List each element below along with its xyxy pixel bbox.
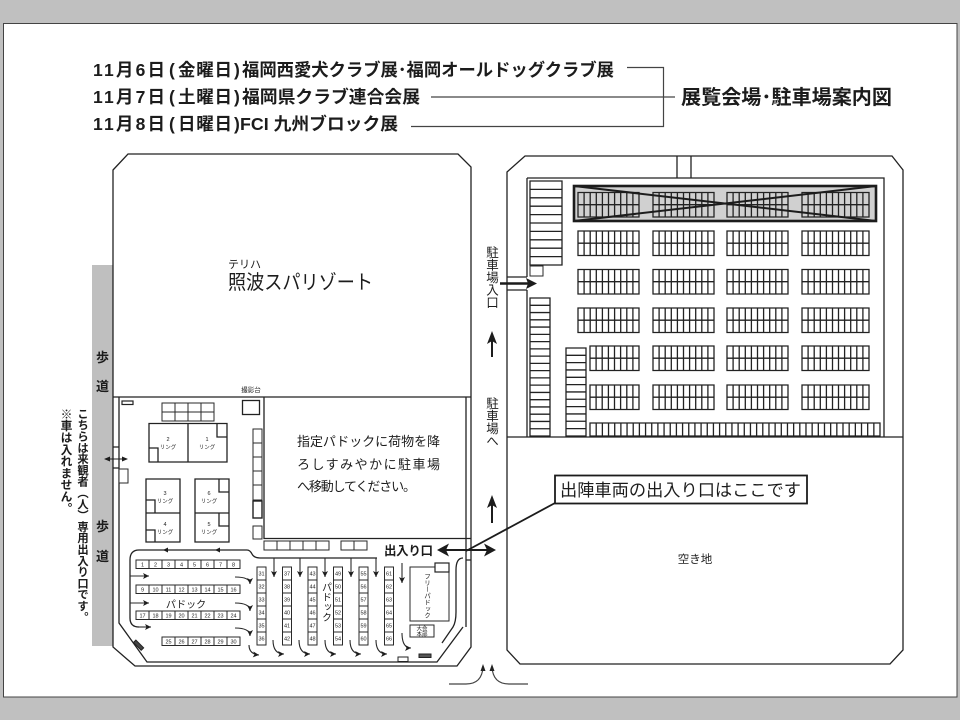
tents along divider <box>264 541 367 550</box>
paddock stall columns 31-66: 54 <box>335 636 341 642</box>
tent grid <box>162 403 214 421</box>
unloading instructions: 指定パドックに荷物を降 <box>297 434 440 449</box>
paddock circulation route <box>130 548 411 655</box>
paddock stall columns 31-66: 63 <box>386 598 392 604</box>
paddock stall columns 31-66: 34 <box>258 610 265 616</box>
to parking label: 駐車場へ <box>484 396 498 447</box>
exit lane curve <box>442 558 463 643</box>
heading: event schedule: 日曜日 <box>178 114 232 134</box>
walkway band: 歩 <box>96 350 109 365</box>
walkway band: 道 <box>96 549 109 564</box>
up arrow 1 <box>487 331 497 357</box>
paddock label vertical: パドック <box>320 582 332 622</box>
paddock stalls 9-16: 9 <box>141 588 144 594</box>
paddock stalls 9-16 <box>136 585 240 594</box>
paddock stalls 17-24: 24 <box>230 614 237 620</box>
paddock stall columns 31-66: 62 <box>386 584 392 590</box>
paddock stall columns 31-66: 33 <box>258 598 265 604</box>
walkway band: 道 <box>96 379 109 394</box>
paddock stalls 25-30: 30 <box>230 640 237 646</box>
paddock stall columns 31-66: 31 <box>258 572 265 578</box>
paddock stalls 9-16: 13 <box>191 588 198 594</box>
rings 1 and 2 <box>149 424 227 462</box>
left note about visitor entrance: こちらは来観者（人）専用出入り口です。 <box>76 408 89 623</box>
heading: event schedule: 11月6日 <box>93 60 165 80</box>
left note about visitor entrance: ※車は入れません。 <box>59 408 73 514</box>
paddock stalls 9-16: 15 <box>217 588 224 594</box>
paddock stall columns 31-66: 55 <box>360 572 367 578</box>
paddock stall columns 31-66: 65 <box>386 624 392 630</box>
bottom parking strip <box>590 423 880 436</box>
paddock stalls 17-24 <box>136 611 240 620</box>
closed parking block <box>574 186 876 221</box>
paddock stalls 1-8: 1 <box>141 562 144 568</box>
rings 5 and 6: リング <box>201 497 218 505</box>
paddock stall columns 31-66: 38 <box>284 584 290 590</box>
paddock stalls 17-24: 17 <box>139 614 146 620</box>
schedule bracket connector <box>411 68 675 126</box>
paddock stall columns 31-66: 36 <box>258 636 265 642</box>
paddock stalls 9-16: 11 <box>166 588 171 594</box>
corner marker lower left <box>133 640 144 650</box>
paddock stalls 1-8: 8 <box>232 562 235 568</box>
paddock stall columns 31-66: 47 <box>309 624 316 630</box>
paddock label horizontal: パドック <box>166 599 206 611</box>
vacant lot label: 空き地 <box>678 553 713 566</box>
unloading instructions <box>297 434 440 494</box>
heading: event schedule: ( <box>169 114 175 134</box>
paddock stalls 25-30: 26 <box>178 640 185 646</box>
heading: event schedule: 福岡西愛犬クラブ展･福岡オールドッグクラブ展 <box>242 60 614 80</box>
rings 5 and 6: 5 <box>207 522 211 528</box>
paddock stalls 17-24: 22 <box>204 614 211 620</box>
side tents <box>253 429 262 539</box>
free paddock <box>410 563 449 621</box>
paddock stalls 1-8: 2 <box>154 562 157 568</box>
rings 1 and 2: リング <box>160 443 177 451</box>
resort label: 照波スパリゾート <box>228 271 373 294</box>
rings 5 and 6: 6 <box>207 491 211 497</box>
paddock stall columns 31-66: 57 <box>360 598 367 604</box>
rings 1 and 2: リング <box>199 443 216 451</box>
paddock stalls 9-16: 16 <box>230 588 237 594</box>
paddock stall columns 31-66: 37 <box>284 572 290 578</box>
paddock stalls 17-24: 18 <box>152 614 159 620</box>
paddock stalls 9-16: 12 <box>178 588 185 594</box>
paddock stall columns 31-66: 40 <box>284 610 290 616</box>
approach arrows bottom <box>449 664 528 684</box>
paddock stalls 1-8: 3 <box>167 562 170 568</box>
heading: event schedule <box>93 60 614 134</box>
rings 3 and 4: リング <box>157 497 174 505</box>
tournament office: 大会 <box>416 624 428 632</box>
entrance double arrow <box>437 544 496 556</box>
tournament office <box>410 624 434 638</box>
parking lot outline <box>507 156 903 664</box>
paddock stall columns 31-66: 52 <box>335 610 341 616</box>
resort label <box>228 259 373 294</box>
rings 3 and 4: リング <box>157 528 174 536</box>
heading: event schedule: 土曜日 <box>178 87 232 107</box>
paddock stalls 1-8: 6 <box>206 562 209 568</box>
paddock stall columns 31-66: 56 <box>360 584 367 590</box>
paddock stall columns 31-66: 48 <box>309 636 316 642</box>
heading: event schedule: 11月8日 <box>93 114 165 134</box>
small markers lower right <box>398 654 431 662</box>
rings 1 and 2: 1 <box>205 437 209 443</box>
walkway band <box>92 265 113 646</box>
paddock stall columns 31-66: 51 <box>335 598 341 604</box>
unloading instructions: ろしすみやかに駐車場 <box>297 457 440 472</box>
small marker top left <box>122 401 133 404</box>
paddock stall columns 31-66: 50 <box>335 584 341 590</box>
left parking strips <box>530 181 586 436</box>
heading: event schedule: 金曜日 <box>178 60 232 80</box>
parking entrance label: 駐車場入口 <box>484 245 498 308</box>
paddock stalls 17-24: 21 <box>191 614 198 620</box>
paddock stall columns 31-66: 41 <box>284 624 290 630</box>
paddock stall columns 31-66 <box>257 567 394 645</box>
side gate with double arrow <box>104 447 128 483</box>
paddock stalls 17-24: 23 <box>217 614 224 620</box>
callout leader line <box>466 503 555 551</box>
paddock stalls 17-24: 19 <box>165 614 172 620</box>
paddock stalls 1-8: 7 <box>219 562 222 568</box>
photo stand: 撮影台 <box>241 385 261 394</box>
paddock stalls 1-8 <box>136 560 240 568</box>
paddock stall columns 31-66: 35 <box>258 624 265 630</box>
paddock stalls 9-16: 14 <box>204 588 211 594</box>
paddock stalls 25-30 <box>162 637 240 646</box>
heading: event schedule: ) <box>234 60 240 80</box>
paddock stalls 25-30: 29 <box>217 640 224 646</box>
paddock stall columns 31-66: 58 <box>360 610 367 616</box>
resort label: テリハ <box>228 259 261 271</box>
heading: event schedule: 11月7日 <box>93 87 165 107</box>
paddock stall columns 31-66: 45 <box>309 598 316 604</box>
parking entrance arrow <box>500 278 537 289</box>
paddock stall columns 31-66: 66 <box>386 636 392 642</box>
heading: event schedule: FCI 九州ブロック展 <box>240 114 398 134</box>
paddock stalls 1-8: 5 <box>193 562 196 568</box>
heading: event schedule: 福岡県クラブ連合会展 <box>242 87 420 107</box>
paddock stall columns 31-66: 49 <box>335 572 341 578</box>
rings 3 and 4 <box>146 479 180 542</box>
paddock stalls 1-8: 4 <box>180 562 183 568</box>
heading: event schedule: ( <box>169 87 175 107</box>
rings 5 and 6 <box>195 479 229 542</box>
paddock stalls 25-30: 25 <box>165 640 172 646</box>
paddock stall columns 31-66: 64 <box>386 610 392 616</box>
unloading instructions: へ移動してください。 <box>297 479 416 494</box>
rings 1 and 2: 2 <box>166 437 170 443</box>
paddock stall columns 31-66: 61 <box>386 572 392 578</box>
paddock stalls 17-24: 20 <box>178 614 185 620</box>
paddock stall columns 31-66: 44 <box>309 584 316 590</box>
entrance label: 出入り口 <box>384 544 433 558</box>
tournament office: 本部 <box>416 630 428 638</box>
paddock stall columns 31-66: 46 <box>309 610 316 616</box>
paddock stall columns 31-66: 53 <box>335 624 341 630</box>
walkway band: 歩 <box>96 519 109 534</box>
paddock stalls 9-16: 10 <box>152 588 159 594</box>
callout <box>555 476 807 504</box>
heading: event schedule: ) <box>234 114 240 134</box>
title: 展覧会場･駐車場案内図 <box>681 86 892 109</box>
parking grid rows <box>578 231 869 410</box>
paddock stalls 25-30: 28 <box>204 640 211 646</box>
heading: event schedule: ) <box>234 87 240 107</box>
rings 3 and 4: 4 <box>163 522 167 528</box>
left note about visitor entrance <box>59 408 89 623</box>
paddock stall columns 31-66: 32 <box>258 584 265 590</box>
rings 5 and 6: リング <box>201 528 218 536</box>
paddock stall columns 31-66: 59 <box>360 624 367 630</box>
paddock stall columns 31-66: 43 <box>309 572 316 578</box>
free paddock: フリーパドック <box>422 573 431 619</box>
paddock stall columns 31-66: 39 <box>284 598 290 604</box>
heading: event schedule: ( <box>169 60 175 80</box>
paddock stall columns 31-66: 60 <box>360 636 367 642</box>
photo stand <box>241 385 261 414</box>
callout: 出陣車両の出入り口はここです <box>560 481 801 500</box>
up arrow 2 <box>487 495 497 523</box>
paddock stall columns 31-66: 42 <box>284 636 290 642</box>
paddock stalls 25-30: 27 <box>191 640 198 646</box>
venue site outline <box>113 154 471 666</box>
rings 3 and 4: 3 <box>163 491 167 497</box>
